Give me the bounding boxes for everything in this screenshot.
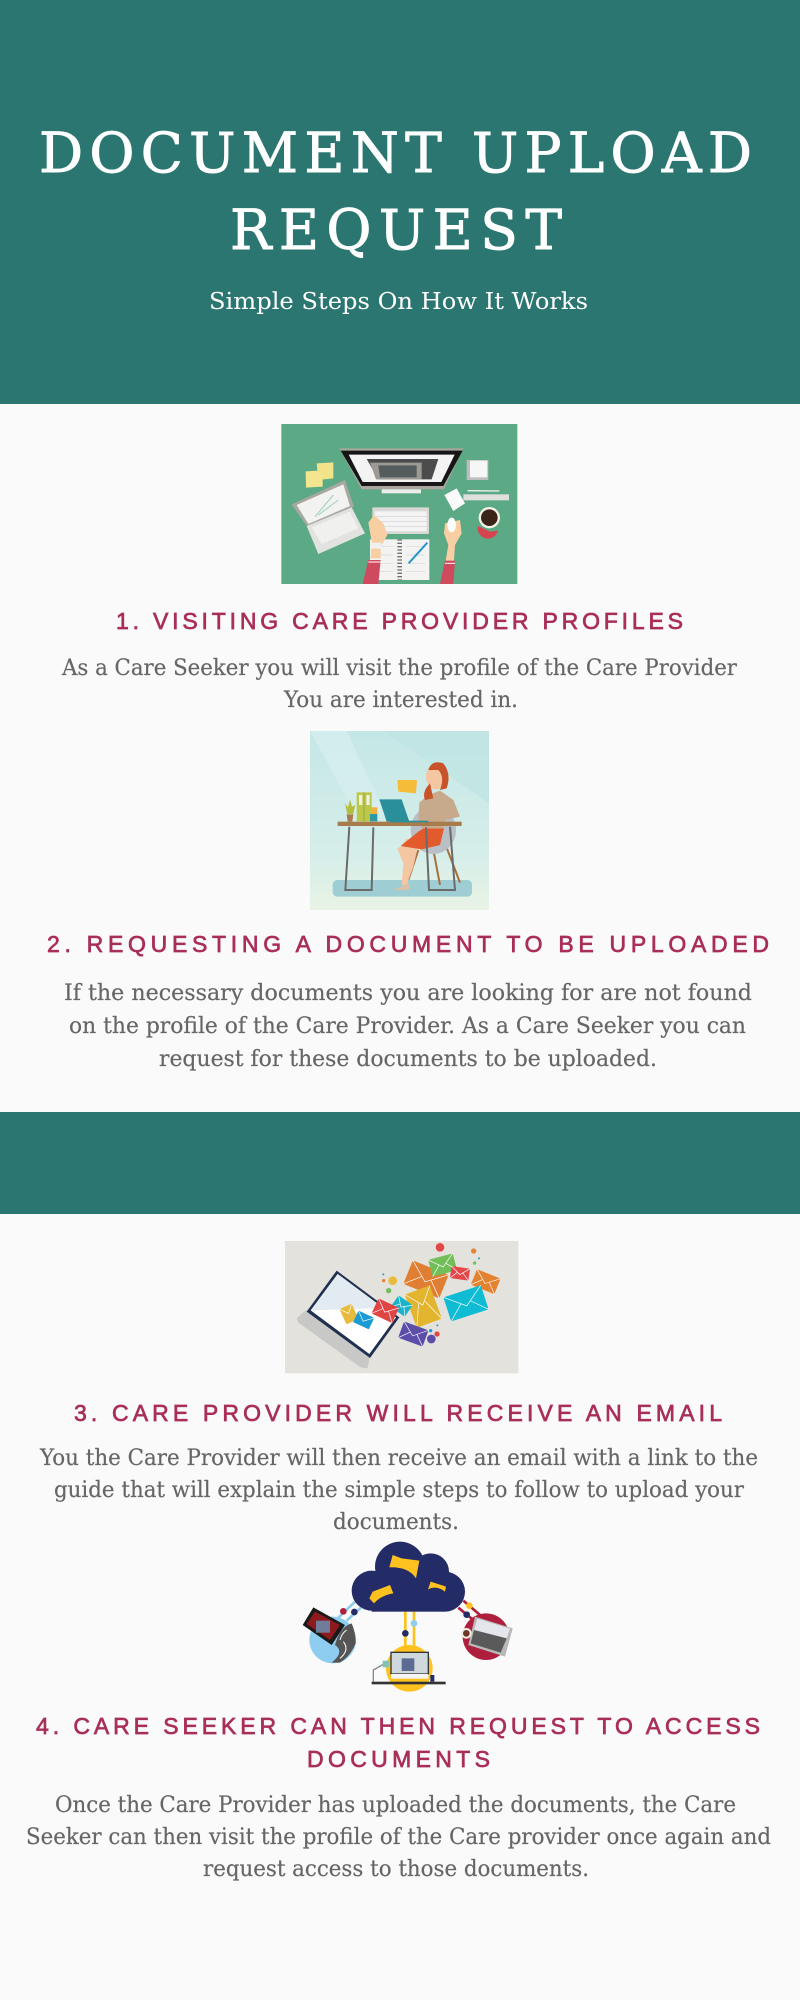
- text block 1: You are interested in.: [283, 688, 518, 713]
- heading 4: [36, 1713, 760, 1772]
- text block 4: request access to those documents.: [203, 1857, 589, 1882]
- text block 3: You the Care Provider will then receive an email with a link to the: [39, 1446, 758, 1471]
- text block 2: [64, 981, 752, 1072]
- heading 4: 4. CARE SEEKER CAN THEN REQUEST TO ACCESS: [36, 1713, 760, 1739]
- text block 2: request for these documents to be uploaded.: [159, 1047, 657, 1072]
- illustration: cloud connected to devices: [303, 1542, 513, 1692]
- illustration: woman at desk with laptop: [310, 731, 489, 910]
- text block 1: [61, 656, 737, 713]
- panel: step 3: [39, 1241, 758, 1535]
- heading 2: 2. REQUESTING A DOCUMENT TO BE UPLOADED: [47, 931, 769, 957]
- title: [39, 121, 752, 262]
- text block 4: Once the Care Provider has uploaded the documents, the Care: [55, 1793, 736, 1818]
- panel: step 1: [61, 424, 737, 713]
- panel: step 2: [47, 731, 769, 1072]
- heading 1: 1. VISITING CARE PROVIDER PROFILES: [116, 608, 683, 634]
- text block 4: [26, 1793, 771, 1882]
- title: DOCUMENT UPLOAD: [39, 121, 752, 185]
- subtitle: Simple Steps On How It Works: [209, 289, 588, 315]
- text block 3: guide that will explain the simple steps to follow to upload your: [54, 1478, 744, 1503]
- heading 3: 3. CARE PROVIDER WILL RECEIVE AN EMAIL: [74, 1400, 722, 1426]
- header banner: [0, 0, 800, 404]
- illustration: laptop sending envelopes: [285, 1241, 518, 1373]
- title: REQUEST: [230, 198, 562, 262]
- divider band: [0, 1112, 800, 1214]
- text block 1: As a Care Seeker you will visit the profile of the Care Provider: [61, 656, 737, 681]
- panel: step 4: [26, 1542, 771, 1882]
- text block 3: [39, 1446, 758, 1535]
- text block 2: If the necessary documents you are looking for are not found: [64, 981, 752, 1006]
- heading 4: DOCUMENTS: [307, 1746, 490, 1772]
- text block 4: Seeker can then visit the profile of the Care provider once again and: [26, 1825, 771, 1850]
- text block 2: on the profile of the Care Provider. As a Care Seeker you can: [69, 1014, 746, 1039]
- illustration: desk with computer seen from above: [281, 424, 517, 584]
- text block 3: documents.: [333, 1510, 459, 1535]
